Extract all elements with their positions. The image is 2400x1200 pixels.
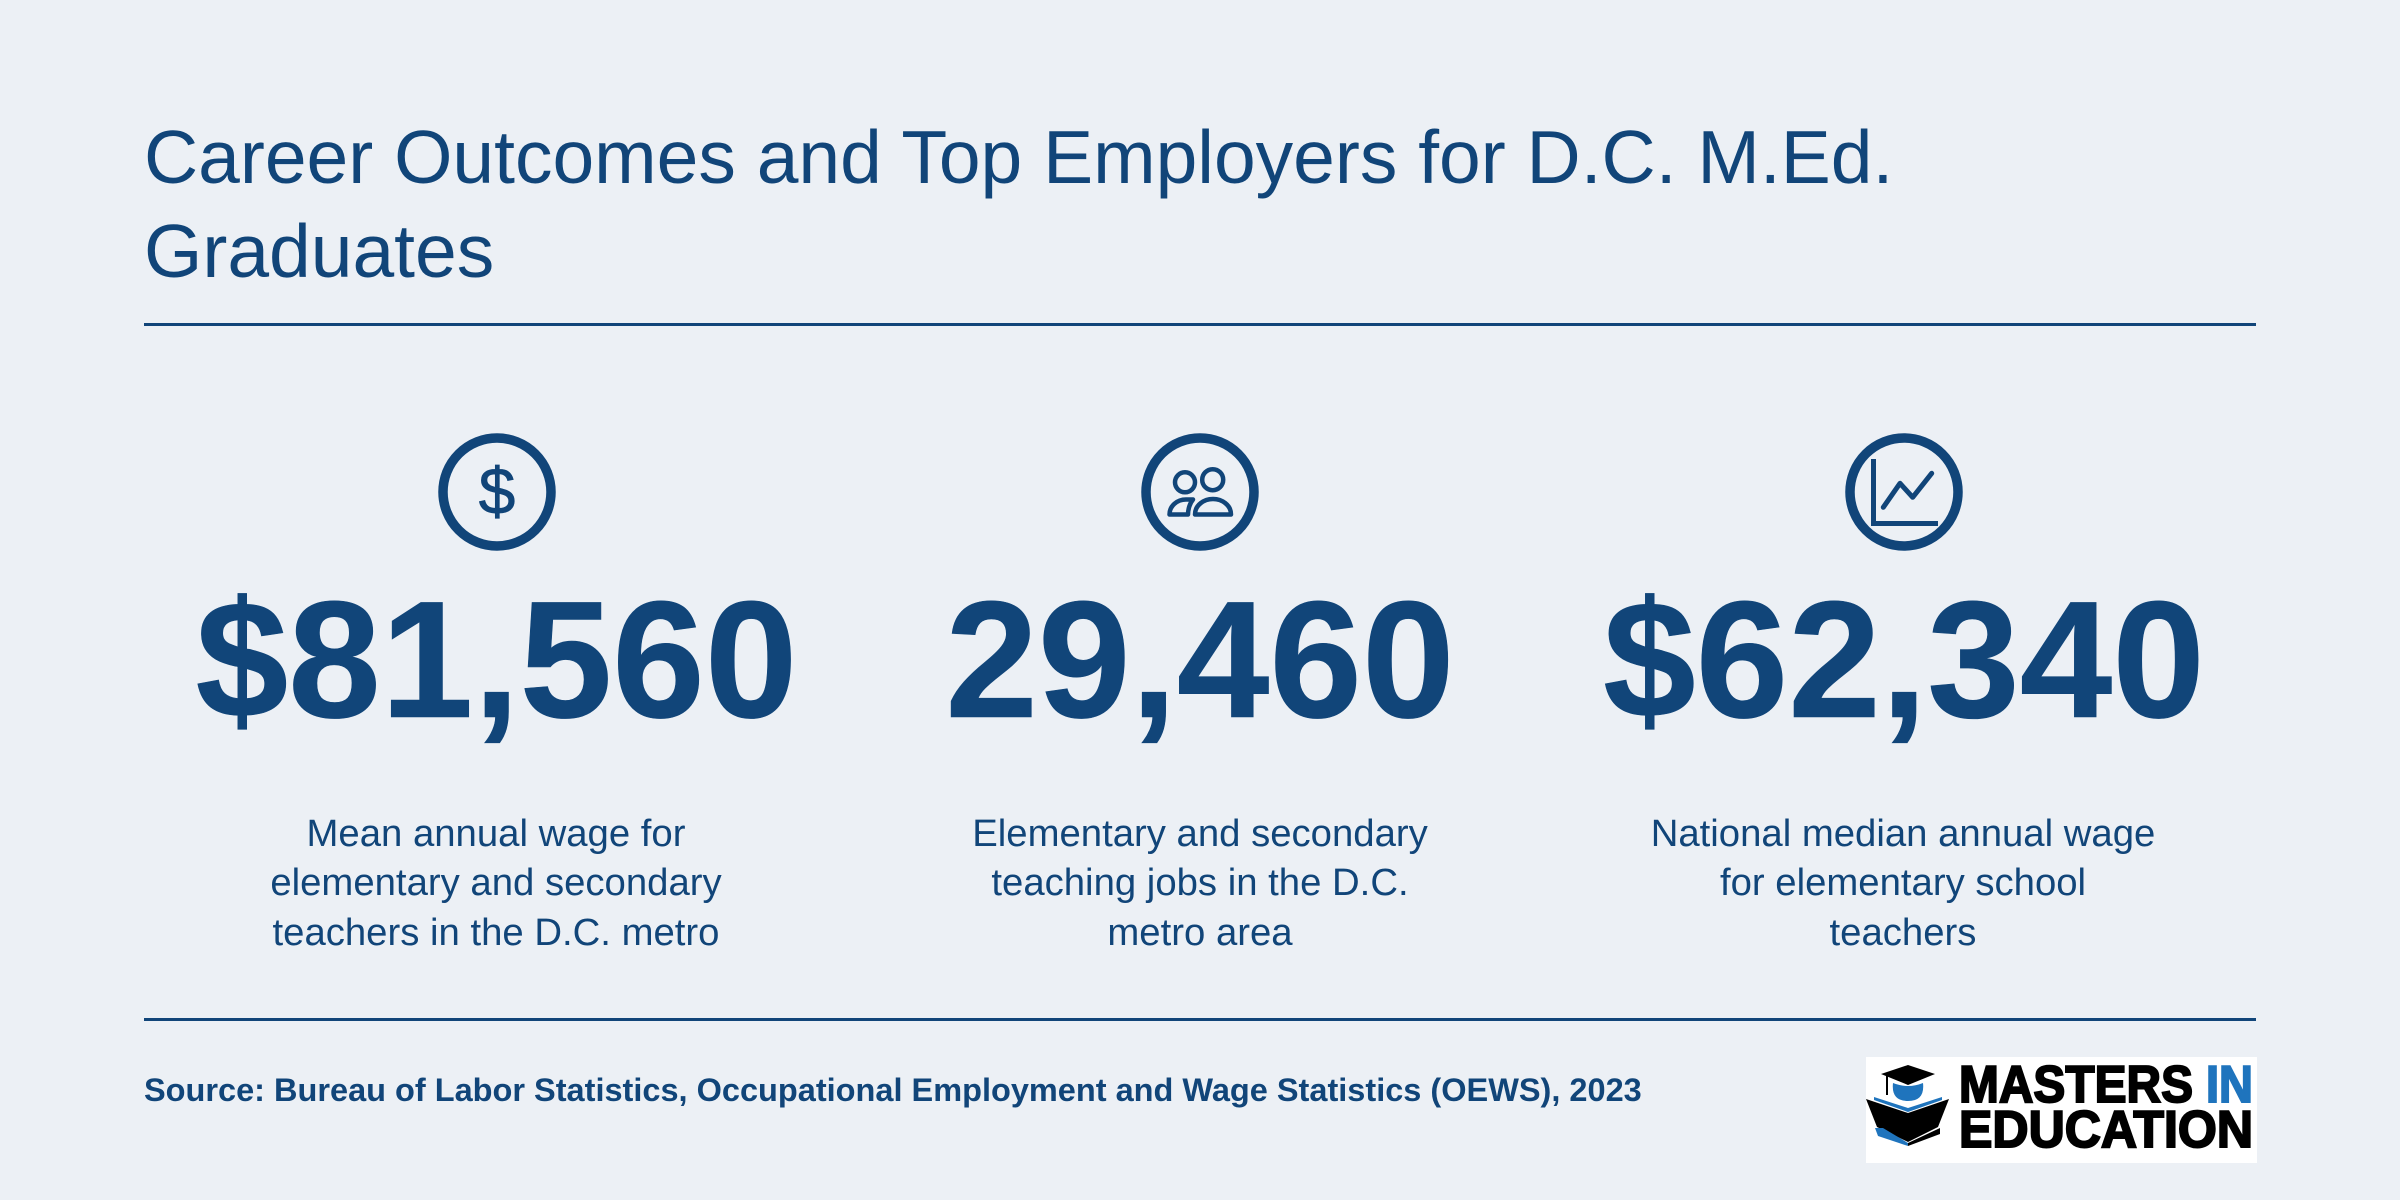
- logo wordmark: IN: [2206, 1056, 2253, 1114]
- description: mean wage: elementary and secondary: [270, 861, 723, 904]
- icon: line chart: [1850, 438, 1958, 546]
- description: mean wage: Mean annual wage for: [307, 812, 686, 855]
- description: mean wage: teachers in the D.C. metro: [273, 911, 719, 954]
- logo wordmark: EDUCATION: [1959, 1101, 2253, 1159]
- icon: dollar: [443, 438, 551, 546]
- logo wordmark: [1959, 1056, 2253, 1159]
- description: mean wage: [270, 812, 723, 954]
- description: national wage: [1651, 812, 2155, 954]
- stat: jobs value: 29,460: [945, 567, 1455, 753]
- description: national wage: teachers: [1830, 911, 1976, 954]
- description: national wage: for elementary school: [1720, 861, 2086, 904]
- description: jobs: Elementary and secondary: [972, 812, 1429, 855]
- panel: national wage: [1603, 438, 2205, 954]
- logo wordmark: MASTERS: [1959, 1056, 2193, 1114]
- source note: Source: Bureau of Labor Statistics, Occupational Employment and Wage Statistics (OEWS), 2023: [144, 1072, 1642, 1108]
- description: national wage: National median annual wage: [1651, 812, 2155, 855]
- title: [144, 115, 1893, 293]
- title: Graduates: [144, 209, 494, 293]
- stat: national wage value: $62,340: [1603, 567, 2205, 753]
- stat: mean wage value: $81,560: [196, 567, 797, 753]
- description: jobs: [972, 812, 1429, 954]
- panel: teaching jobs: [945, 438, 1455, 954]
- icon: dollar: $: [479, 454, 515, 528]
- description: jobs: teaching jobs in the D.C.: [991, 861, 1409, 904]
- icon: book and cap: [1866, 1065, 1949, 1146]
- panel: mean wage: [196, 438, 797, 954]
- description: jobs: metro area: [1107, 911, 1293, 954]
- title: Career Outcomes and Top Employers for D.C. M.Ed.: [144, 115, 1893, 199]
- logo: [1866, 1056, 2257, 1163]
- icon: people: [1146, 438, 1254, 546]
